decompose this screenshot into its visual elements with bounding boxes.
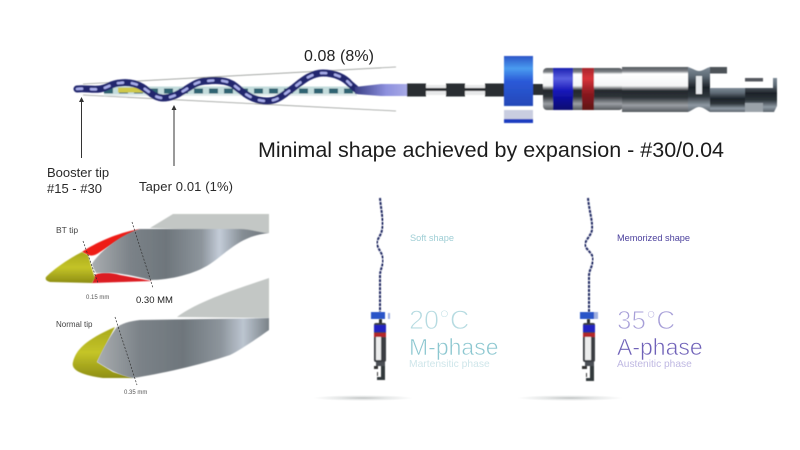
- gold tip: [46, 252, 95, 283]
- label: 0.30 MM: 0.30 MM: [136, 295, 173, 306]
- panel: normal tip diagram: [56, 278, 269, 396]
- stopper: [371, 312, 390, 319]
- label: normal tip: Normal tip: [56, 320, 93, 329]
- panel: A-phase file: [517, 198, 703, 401]
- blade face: [92, 229, 269, 280]
- phase full name: Austenitic phase: [617, 359, 692, 370]
- phase full name: Martensitic phase: [409, 359, 490, 370]
- red upper relief: [82, 229, 140, 256]
- file wire: [377, 198, 383, 312]
- heading: minimal shape: Minimal shape achieved by expansion - #30/0.04: [258, 138, 724, 162]
- file wire: [585, 198, 593, 312]
- blade back: [150, 214, 269, 233]
- label: booster tip: Booster tip: [47, 165, 109, 180]
- arrow: booster tip: [79, 97, 84, 158]
- blue silicone stopper: [504, 56, 533, 123]
- wavy file blade: [77, 73, 357, 101]
- floor shadow: [313, 395, 413, 401]
- label: memorized shape: Memorized shape: [617, 233, 690, 243]
- temperature: 35°C: [617, 305, 675, 335]
- label: 0.15 mm: 0.15 mm: [86, 295, 109, 301]
- straight inner flutes: [104, 90, 357, 95]
- blade back: [177, 278, 269, 318]
- arrow: taper: [172, 105, 176, 166]
- depth marked shaft: [407, 84, 505, 96]
- gold tip: [73, 327, 133, 378]
- handle: [582, 319, 595, 381]
- dashed measure lines: [83, 222, 153, 288]
- label: soft shape: Soft shape: [410, 233, 454, 243]
- label: BT tip: BT tip: [56, 225, 78, 235]
- panel: BT tip diagram: [46, 214, 269, 306]
- dashed measure line: [115, 317, 137, 385]
- temperature: 20°C: [409, 305, 469, 335]
- label: 0.35 mm: 0.35 mm: [124, 390, 147, 396]
- heading: taper value: 0.08 (8%): [304, 48, 374, 65]
- handle: [533, 67, 777, 112]
- label: taper: Taper 0.01 (1%): [139, 179, 233, 194]
- phase: A-phase: [617, 334, 703, 360]
- taper guide lines: [83, 67, 396, 111]
- blue tapered neck: [355, 84, 407, 96]
- panel: M-phase file: [313, 198, 498, 401]
- handle: [374, 319, 386, 380]
- stopper: [580, 312, 598, 319]
- blade face: [97, 318, 269, 378]
- large file illustration: [77, 56, 777, 123]
- phase: M-phase: [409, 334, 498, 360]
- label: booster tip: #15 - #30: [47, 181, 102, 196]
- red lower relief: [92, 273, 152, 283]
- floor shadow: [517, 395, 623, 401]
